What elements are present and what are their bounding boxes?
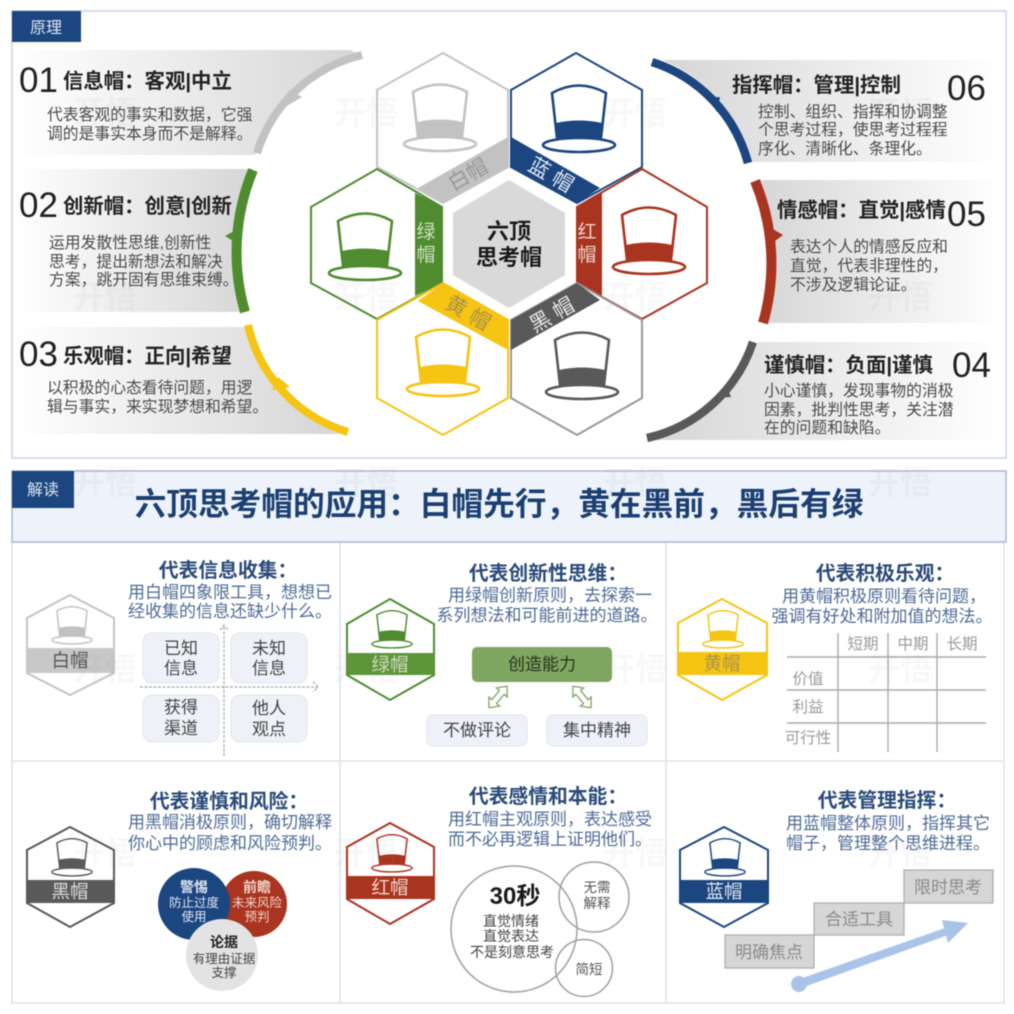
text 02 [49, 234, 239, 289]
watermarks: 开悟 [868, 651, 932, 687]
panel: item 03 yellow hat [15, 325, 348, 434]
description: 经收集的信息还缺少什么。 [128, 602, 332, 621]
tab: 解读: 解读 [27, 481, 59, 499]
number 02: 02 [19, 186, 58, 225]
panel: item 06 blue hat [652, 60, 1000, 163]
hexagon: white hat [377, 53, 508, 203]
description [128, 813, 332, 853]
description: 用红帽主观原则，表达感受 [448, 810, 652, 829]
title: 六顶思考帽的应用：白帽先行，黄在黑前，黑后有绿 [135, 486, 864, 522]
watermarks: 开悟 [334, 279, 398, 315]
heading 03: 乐观帽：正向|希望 [63, 345, 232, 368]
circles diagram: 30 seconds: 无需 [584, 880, 610, 895]
watermarks: 开悟 [868, 465, 932, 501]
venn diagram: three circles: 预判 [244, 910, 270, 924]
heading: 代表感情和本能： [469, 786, 627, 808]
text 05: 表达个人的情感反应和 [790, 237, 948, 256]
text 04: 小心谨慎，发现事物的消极 [764, 382, 954, 400]
arc: green [237, 170, 253, 312]
hexagon: blue hat [511, 53, 642, 203]
watermarks: 开悟 [603, 651, 667, 687]
watermarks: 开悟 [603, 465, 667, 501]
hexagon: white hat: 白帽 [444, 155, 492, 196]
quadrant diagram: 他人 [252, 699, 286, 718]
hexagon: center title: 思考帽 [476, 245, 542, 270]
text 04: 在的问题和缺陷。 [764, 419, 890, 437]
tab: 原理: 原理 [30, 20, 62, 37]
arrow: black [715, 387, 731, 398]
hexagon: blue hat: 蓝 帽 [524, 154, 577, 197]
number 03: 03 [19, 335, 58, 374]
badge: black hat: 黑帽 [51, 881, 89, 902]
hexagon: yellow hat [377, 283, 508, 435]
arrow: blue [708, 97, 720, 112]
cell: blue hat application [680, 789, 993, 992]
quadrant diagram: 已知 [164, 639, 198, 658]
text 01 [47, 106, 253, 143]
text 06: 个思考过程，使思考过程程 [758, 121, 948, 139]
text 02: 思考，提出新想法和解决 [49, 253, 223, 271]
arrow: rising progress [791, 920, 968, 992]
venn diagram: three circles: 防止过度 [169, 895, 219, 910]
cell: red hat application [347, 786, 652, 996]
arc: red [755, 181, 771, 323]
hexagon: center title: 六顶 [487, 219, 531, 244]
creativity diagram: 不做评论 [443, 721, 511, 740]
watermarks: 开悟 [73, 279, 137, 315]
hexagon: green hat: 帽 [416, 244, 436, 266]
badge: blue hat: 蓝帽 [705, 881, 743, 902]
text 03: 辑与事实，来实现梦想和希望。 [47, 398, 268, 416]
text 06 [758, 103, 948, 158]
table: value matrix: 长期 [946, 635, 978, 653]
arc: yellow [248, 325, 348, 432]
description: 系列想法和可能前进的道路。 [436, 606, 658, 625]
tab: 原理 [12, 11, 81, 42]
text 05: 不涉及逻辑论证。 [790, 276, 916, 294]
watermarks [73, 95, 932, 871]
venn diagram: three circles: 有理由证据 [193, 952, 255, 966]
venn diagram: three circles: 使用 [181, 909, 207, 924]
text 01: 代表客观的事实和数据，它强 [47, 106, 253, 124]
panel: item 05 red hat [755, 180, 1000, 323]
watermarks: 开悟 [334, 835, 398, 871]
creativity diagram [427, 647, 647, 746]
circles diagram: 30 seconds: 直觉情绪 [483, 913, 539, 929]
hexagon: black hat: 黑 帽 [526, 294, 579, 337]
quadrant diagram [140, 625, 318, 756]
badge: green hat: 绿帽 [371, 654, 409, 675]
arrow: white [285, 90, 302, 107]
description [436, 586, 658, 625]
watermarks: 开悟 [334, 95, 398, 131]
badge: yellow hat: 黄帽 [703, 653, 741, 674]
number 01: 01 [19, 61, 58, 100]
hexagon: green hat: 绿 [416, 221, 436, 243]
hexagon: black hat [511, 283, 642, 435]
quadrant diagram: 信息 [164, 659, 198, 678]
venn diagram: three circles: 未来风险 [232, 895, 282, 910]
watermarks: 开悟 [868, 95, 932, 131]
circles diagram: 30 seconds: 解释 [584, 896, 611, 911]
description [772, 587, 992, 626]
number 06: 06 [947, 69, 986, 108]
heading: 代表信息收集： [159, 559, 297, 582]
text 01: 调的是事实本身而不是解释。 [47, 125, 252, 143]
watermarks: 开悟 [868, 279, 932, 315]
description: 强调有好处和附加值的想法。 [772, 607, 992, 626]
venn diagram: three circles [158, 868, 287, 991]
badge: red hat [347, 823, 434, 924]
quadrant diagram: 未知 [252, 639, 286, 658]
text 06: 序化、清晰化、条理化。 [758, 140, 932, 158]
watermarks: 开悟 [603, 835, 667, 871]
venn diagram: three circles: 前瞻 [243, 879, 271, 895]
description: 你心中的顾虑和风险预判。 [128, 834, 332, 853]
heading: 代表创新性思维： [469, 563, 627, 585]
table: value matrix: 价值 [792, 670, 824, 688]
circles diagram: 30 seconds: 不是刻意思考 [470, 944, 554, 960]
arrow: yellow [272, 377, 290, 390]
watermarks: 开悟 [334, 651, 398, 687]
arc: white [257, 55, 362, 153]
hexagon: green hat [311, 169, 442, 319]
table: value matrix: 利益 [792, 698, 824, 716]
quadrant diagram: 观点 [252, 720, 286, 739]
heading 04: 谨慎帽：负面|谨慎 [764, 353, 933, 377]
watermarks: 开悟 [73, 465, 137, 501]
creativity diagram: 创造能力 [508, 655, 576, 674]
arrow: red [771, 228, 783, 244]
cell: yellow hat application [678, 563, 992, 752]
heading: 代表管理指挥： [818, 789, 956, 812]
watermarks: 开悟 [868, 835, 932, 871]
watermarks: 开悟 [73, 651, 137, 687]
panel: principle frame [12, 11, 1006, 458]
watermarks: 开悟 [334, 465, 398, 501]
circles diagram: 30 seconds: 30秒 [490, 883, 540, 910]
watermarks: 开悟 [73, 835, 137, 871]
cell: white hat application [27, 559, 332, 756]
description: 帽子，管理整个思维进程。 [786, 834, 990, 853]
text 05: 直觉，代表非理性的， [790, 257, 948, 275]
heading: 代表谨慎和风险： [150, 790, 308, 813]
text 03 [47, 379, 268, 416]
description: 而不必再逻辑上证明他们。 [448, 830, 652, 849]
badge: green hat [347, 599, 434, 700]
text 06: 控制、组织、指挥和协调整 [758, 103, 948, 121]
circles diagram: 30 seconds [451, 862, 629, 996]
header band: application title [12, 471, 1006, 542]
badge: blue hat [680, 827, 768, 927]
description: 用绿帽创新原则，去探索一 [448, 586, 652, 605]
description [448, 810, 652, 849]
heading: 代表积极乐观： [816, 563, 954, 585]
table: value matrix [785, 633, 986, 752]
table: value matrix: 可行性 [785, 729, 831, 747]
text 02: 方案，跳开固有思维束缚。 [49, 271, 239, 289]
tab: 解读 [12, 471, 74, 508]
quadrant diagram: 渠道 [164, 719, 198, 738]
heading 02: 创新帽：创意|创新 [63, 194, 232, 218]
panel: item 04 black hat [647, 342, 1000, 440]
badge: white hat: 白帽 [51, 650, 89, 671]
text 02: 运用发散性思维,创新性 [49, 234, 211, 252]
stair steps: 限时思考 [914, 878, 982, 897]
description [128, 583, 332, 621]
description: 用蓝帽整体原则，指挥其它 [786, 814, 990, 833]
venn diagram: three circles: 支撑 [211, 965, 237, 980]
heading 01: 信息帽：客观|中立 [63, 69, 232, 93]
badge: white hat [27, 595, 114, 695]
stair steps: 合适工具 [825, 910, 893, 929]
hexagon: center title [453, 180, 565, 308]
cell: black hat application [27, 790, 332, 991]
table: value matrix: 中期 [897, 635, 929, 653]
hexagon: yellow hat: 黄 帽 [441, 292, 494, 335]
number 04: 04 [952, 346, 991, 385]
quadrant diagram: 信息 [252, 659, 286, 678]
table: value matrix: 短期 [847, 635, 879, 653]
text 04 [764, 382, 954, 437]
description: 用黄帽积极原则看待问题， [782, 587, 986, 606]
panel: item 01 white hat [15, 50, 362, 155]
hexagon: red hat: 红 [577, 221, 597, 243]
heading 05: 情感帽：直觉|感情 [777, 199, 946, 222]
badge: yellow hat [678, 599, 767, 700]
circles diagram: 30 seconds: 直觉表达 [483, 928, 539, 944]
description [786, 814, 990, 853]
watermarks: 开悟 [603, 279, 667, 315]
circles diagram: 30 seconds: 简短 [576, 961, 602, 977]
creativity diagram: 集中精神 [563, 721, 631, 740]
badge: black hat [27, 827, 114, 927]
badge: red hat: 红帽 [371, 877, 409, 898]
arrow: green [225, 229, 238, 244]
description: 用黑帽消极原则，确切解释 [128, 813, 332, 832]
text 05 [790, 237, 948, 294]
text 04: 因素，批判性思考，关注潜 [764, 401, 954, 419]
venn diagram: three circles: 论据 [210, 934, 238, 950]
quadrant diagram: 获得 [164, 698, 198, 717]
number 05: 05 [947, 195, 986, 234]
watermarks: 开悟 [73, 95, 137, 131]
venn diagram: three circles: 警惕 [180, 879, 208, 895]
arc: blue [652, 62, 748, 163]
arc: black [647, 342, 753, 438]
heading 06: 指挥帽：管理|控制 [732, 74, 901, 97]
hexagon: red hat [577, 169, 707, 319]
hexagon: red hat: 帽 [577, 244, 597, 266]
watermarks: 开悟 [603, 95, 667, 131]
panel: item 02 green hat [15, 169, 253, 312]
stair steps [725, 870, 993, 968]
description: 用白帽四象限工具，想想已 [128, 583, 332, 602]
cell: green hat application [347, 563, 658, 746]
text 03: 以积极的心态看待问题，用逻 [47, 379, 253, 397]
stair steps: 明确焦点 [735, 943, 803, 962]
grid: application cells [12, 542, 1004, 1003]
